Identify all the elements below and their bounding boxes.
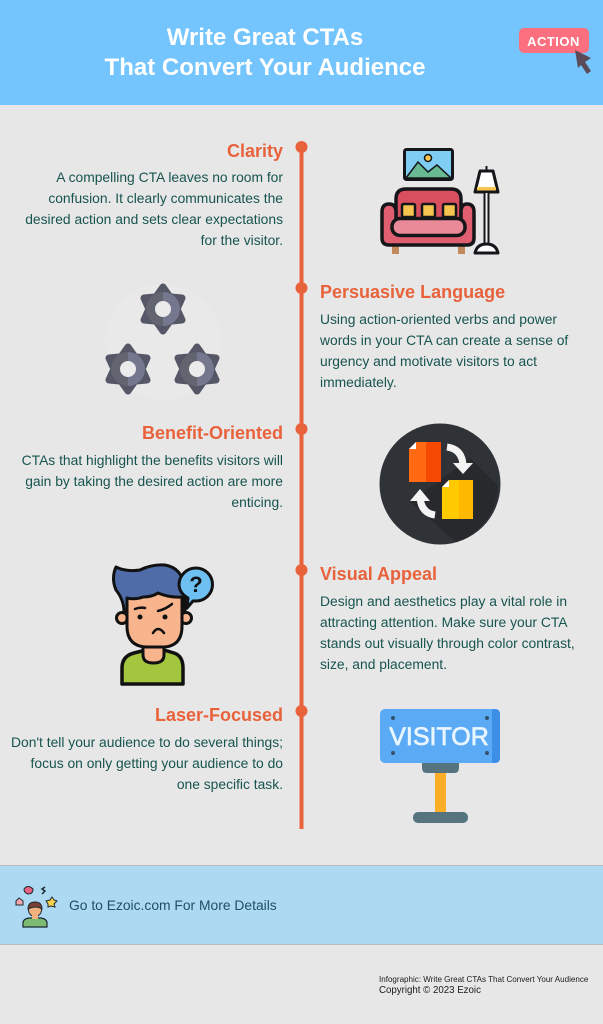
text: benefit-oriented: CTAs that highlight the benefits visitors will — [22, 452, 283, 468]
credits text: Infographic: Write Great CTAs That Convert Your Audience — [379, 975, 588, 984]
text: benefit-oriented — [22, 452, 283, 510]
icon: thinking person — [16, 886, 58, 928]
text: visual appeal: Design and aesthetics play a vital role in — [320, 593, 567, 609]
icon: action button with cursor — [519, 28, 591, 74]
heading: clarity: Clarity — [227, 141, 283, 161]
heading: benefit-oriented: Benefit-Oriented — [142, 423, 283, 443]
credits text: Copyright © 2023 Ezoic — [379, 985, 481, 996]
icon: three gears — [106, 284, 220, 394]
icon: swap documents — [380, 424, 500, 544]
text: laser-focused — [11, 734, 283, 792]
text: clarity: for the visitor. — [201, 232, 283, 248]
text: visual appeal: stands out visually through color contrast, — [320, 635, 575, 651]
footer call-to-action band — [0, 865, 603, 945]
footer link text: Go to Ezoic.com For More Details — [69, 897, 277, 913]
text: persuasive language: words in your CTA can create a sense of — [320, 332, 568, 348]
header band — [0, 0, 603, 105]
title — [104, 24, 425, 81]
heading: visual appeal: Visual Appeal — [320, 564, 437, 584]
text: laser-focused: one specific task. — [177, 776, 283, 792]
text: clarity — [25, 169, 283, 248]
title: That Convert Your Audience — [105, 54, 425, 81]
icon: visitor sign: VISITOR — [389, 723, 489, 751]
text: visual appeal — [320, 593, 575, 672]
text: clarity: A compelling CTA leaves no room for — [56, 169, 283, 185]
icon: confused man with question bubble — [112, 563, 214, 686]
heading: persuasive language: Persuasive Language — [320, 282, 505, 302]
text: visual appeal: size, and placement. — [320, 656, 447, 672]
text: laser-focused: focus on only getting your audience to do — [31, 755, 283, 771]
text: persuasive language: urgency and motivate visitors to act — [320, 353, 537, 369]
text: clarity: desired action and sets clear expectations — [25, 211, 283, 227]
text: persuasive language: immediately. — [320, 374, 397, 390]
timeline line — [296, 141, 308, 829]
heading: laser-focused: Laser-Focused — [155, 705, 283, 725]
icon: confused man with question bubble: ? — [189, 572, 203, 597]
credits text — [379, 975, 588, 996]
text: clarity: confusion. It clearly communicates the — [48, 190, 283, 206]
text: persuasive language — [320, 311, 568, 390]
title: Write Great CTAs — [167, 24, 363, 51]
text: benefit-oriented: gain by taking the desired action are more — [25, 473, 283, 489]
text: persuasive language: Using action-oriented verbs and power — [320, 311, 557, 327]
icon: visitor sign — [380, 709, 500, 823]
text: benefit-oriented: enticing. — [231, 494, 283, 510]
text: visual appeal: attracting attention. Make sure your CTA — [320, 614, 568, 630]
icon: action button with cursor: ACTION — [527, 34, 580, 49]
text: laser-focused: Don't tell your audience to do several things; — [11, 734, 283, 750]
icon: sofa, painting and lamp — [380, 148, 500, 254]
